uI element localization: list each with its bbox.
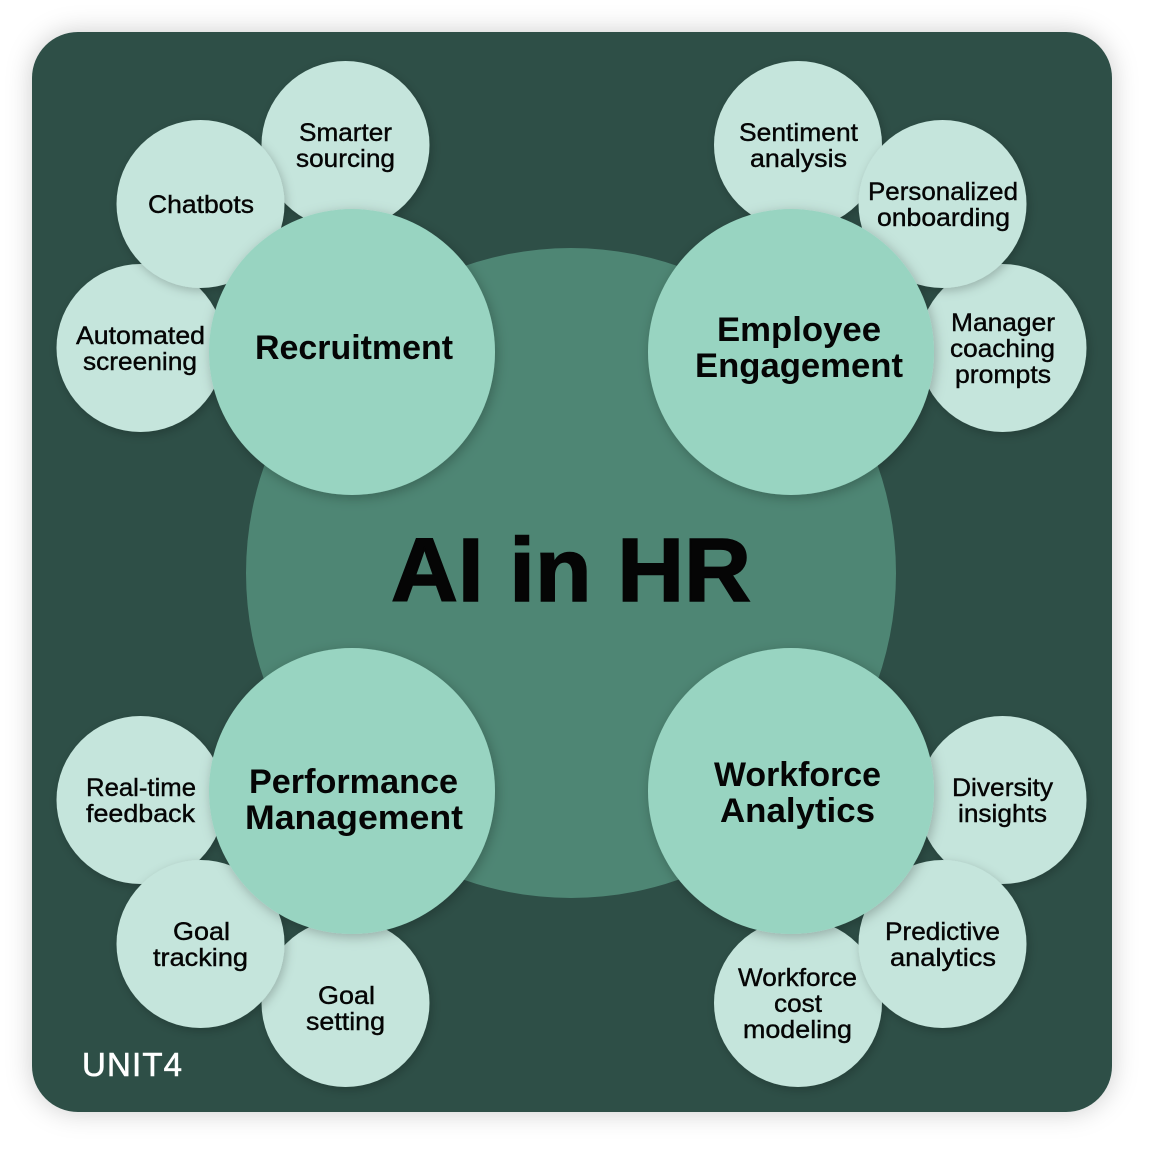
bubble: Smarter sourcing <box>262 61 430 229</box>
hub: Performance Management: Management <box>245 799 463 837</box>
cluster: Performance Management <box>56 648 495 1087</box>
bubble: Smarter sourcing: Smarter <box>299 119 392 147</box>
hub: Workforce Analytics: Workforce <box>714 756 881 794</box>
cluster: Recruitment <box>56 61 495 495</box>
bubble: Manager coaching prompts: prompts <box>955 361 1051 389</box>
bubble: Workforce cost modeling: modeling <box>743 1016 852 1044</box>
bubble: Predictive analytics: Predictive <box>885 918 1000 946</box>
bubble: Goal tracking: tracking <box>153 944 248 972</box>
bubble: Workforce cost modeling: cost <box>774 990 822 1018</box>
bubble: Predictive analytics: analytics <box>890 944 996 972</box>
hub: Recruitment: Recruitment <box>255 329 453 367</box>
bubble: Chatbots: Chatbots <box>148 191 254 219</box>
hub: Workforce Analytics: Analytics <box>720 792 875 830</box>
bubble: Diversity insights: insights <box>958 800 1047 828</box>
bubble: Predictive analytics <box>858 860 1026 1028</box>
hub: Employee Engagement: Employee <box>717 311 881 349</box>
hub: Employee Engagement: Engagement <box>695 347 903 385</box>
bubble: Real-time feedback: Real-time <box>86 774 196 802</box>
bubble: Chatbots <box>116 120 284 288</box>
hub: Performance Management: Performance <box>249 763 458 801</box>
bubble: Workforce cost modeling: Workforce <box>738 964 857 992</box>
cluster: Workforce Analytics <box>648 648 1086 1087</box>
bubble: Diversity insights: Diversity <box>952 774 1054 802</box>
bubble: Manager coaching prompts <box>918 264 1086 432</box>
bubble: Real-time feedback <box>56 716 224 884</box>
bubble: Manager coaching prompts: Manager <box>951 309 1055 337</box>
bubble: Real-time feedback: feedback <box>86 800 196 828</box>
hub: Employee Engagement <box>648 209 934 495</box>
bubble: Goal setting <box>262 919 430 1087</box>
hub: Performance Management <box>209 648 495 934</box>
bubble: Personalized onboarding <box>858 120 1026 288</box>
bubble: Manager coaching prompts: coaching <box>950 335 1055 363</box>
bubble: Sentiment analysis: analysis <box>750 145 847 173</box>
bubble: Workforce cost modeling <box>714 919 882 1087</box>
cluster: Employee Engagement <box>648 61 1086 495</box>
hub: Workforce Analytics <box>648 648 934 934</box>
hub: Recruitment <box>209 209 495 495</box>
bubble: Sentiment analysis <box>714 61 882 229</box>
bubble: Personalized onboarding: onboarding <box>877 204 1010 232</box>
title: AI in HR: AI in HR <box>391 521 751 621</box>
bubble: Personalized onboarding: Personalized <box>868 178 1018 206</box>
bubble: Sentiment analysis: Sentiment <box>739 119 858 147</box>
logo: UNIT4: UNIT4 <box>82 1046 182 1083</box>
bubble: Goal setting: Goal <box>318 982 375 1010</box>
bubble: Goal tracking: Goal <box>173 918 230 946</box>
central circle <box>246 248 896 898</box>
bubble: Automated screening <box>56 264 224 432</box>
bubble: Automated screening: Automated <box>76 322 205 350</box>
bubble: Goal tracking <box>116 860 284 1028</box>
bubble: Automated screening: screening <box>83 348 197 376</box>
bubble: Smarter sourcing: sourcing <box>296 145 395 173</box>
bubble: Diversity insights <box>918 716 1086 884</box>
bubble: Goal setting: setting <box>306 1008 385 1036</box>
